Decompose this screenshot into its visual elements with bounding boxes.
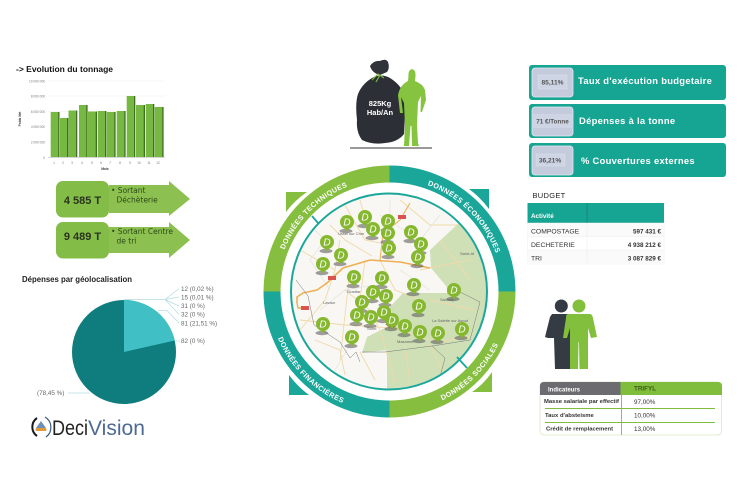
logo: decivision — [32, 417, 145, 440]
bar chart: tonnage per month: Mois — [101, 167, 109, 171]
kpi: depenses a la tonne: 71 €/Tonne — [536, 118, 569, 126]
icon: garbage bag and person — [350, 60, 432, 148]
map: territory with pins: Mazamet — [397, 339, 414, 344]
map: territory with pins: Sorel — [367, 326, 376, 331]
bar chart: tonnage per month: 4 — [81, 161, 83, 165]
heading: depenses par geolocalisation: Dépenses par géolocalisation — [22, 275, 132, 284]
map pins: D — [417, 240, 425, 250]
bar chart: tonnage per month: 11 — [147, 161, 151, 165]
map: territory with pins: Ussel sur Cher — [338, 231, 365, 236]
map pins: D — [378, 274, 386, 284]
table: indicateurs: Masse salariale par effectif — [544, 399, 619, 405]
map pins: D — [458, 324, 466, 336]
table: budget: DECHETERIE — [531, 242, 575, 249]
ring: four data quadrants — [264, 166, 516, 418]
logo: decivision: Deci — [52, 417, 88, 440]
table: indicateurs: Taux d'absteisme — [545, 413, 594, 419]
map: territory with pins — [290, 190, 500, 392]
kpi: depenses a la tonne — [529, 104, 726, 138]
bar chart: tonnage per month: 5 — [91, 161, 93, 165]
kpi: depenses a la tonne: Dépenses à la tonne — [579, 115, 675, 126]
map: territory with pins: La Salette sur Agout — [432, 318, 469, 323]
table: budget: 3 087 829 € — [628, 256, 661, 262]
table: budget: 597 431 € — [633, 228, 661, 236]
map: territory with pins: Saldadi — [440, 297, 453, 302]
map pins: D — [380, 308, 388, 318]
map pins: D — [384, 228, 392, 240]
map pins: D — [353, 310, 361, 322]
kpi: taux d'execution budgetaire — [529, 65, 726, 100]
map pins: D — [415, 302, 423, 312]
heading: budget: BUDGET — [532, 191, 566, 200]
map pins: D — [319, 260, 327, 270]
bar chart: tonnage per month: 2 000 000 — [31, 140, 45, 144]
map pins: D — [401, 322, 409, 332]
map pins — [316, 210, 469, 348]
bar chart: tonnage per month: 6 000 000 — [31, 110, 45, 114]
kpi: couvertures externes: 36,21% — [539, 158, 561, 164]
table: budget: COMPOSTAGE — [531, 228, 580, 236]
map pins: D — [382, 292, 390, 302]
callout: sortant centre de tri: de tri — [116, 236, 136, 246]
bar chart: tonnage per month: 7 — [109, 161, 111, 165]
label: donnees economiques: DONNÉES ÉCONOMIQUES — [428, 180, 500, 252]
kpi: taux d'execution budgetaire: Taux d'exécution budgetaire — [578, 75, 712, 86]
map pins: D — [384, 216, 392, 228]
callout: sortant centre de tri: • Sortant Centre — [111, 227, 173, 236]
icon: garbage bag and person: 825Kg — [369, 99, 392, 108]
table: budget: 4 938 212 € — [628, 242, 661, 249]
map pins: D — [358, 298, 366, 308]
table: budget — [528, 203, 664, 264]
bar chart: tonnage per month — [18, 80, 165, 171]
map pins: D — [323, 238, 331, 248]
kpi: couvertures externes: % Couvertures externes — [581, 155, 695, 166]
map pins: D — [361, 212, 369, 224]
pie chart: depenses: 12 (0,02 %) — [181, 286, 214, 293]
pie chart: depenses: (78,45 %) — [37, 390, 64, 397]
table: indicateurs: 97,00% — [634, 399, 656, 406]
map: territory with pins: Saint-Af — [460, 251, 475, 256]
callout: sortant dechetterie: • Sortant — [111, 186, 146, 195]
callout: sortant dechetterie: Déchèterie — [116, 196, 158, 204]
icon: two people — [545, 300, 597, 369]
map: territory with pins: Gradtar — [347, 289, 361, 294]
bar chart: tonnage per month: 4 000 000 — [31, 125, 45, 129]
pie chart: depenses: 32 (0 %) — [181, 312, 205, 318]
table: budget: TRI — [531, 256, 542, 262]
kpi: taux d'execution budgetaire: 85,11% — [542, 80, 564, 86]
bar chart: tonnage per month: 10 000 000 — [29, 80, 45, 84]
bar chart: tonnage per month: 1 — [53, 161, 55, 165]
table: indicateurs — [540, 382, 722, 435]
pie chart: depenses: 82 (0 %) — [181, 338, 205, 345]
callout: sortant dechetterie — [56, 181, 190, 218]
heading: evolution du tonnage: -> Evolution du tonnage — [16, 64, 113, 74]
table: indicateurs: Crédit de remplacement — [546, 426, 613, 432]
bar chart: tonnage per month: 6 — [100, 161, 102, 165]
icon: garbage bag and person: Hab/An — [367, 108, 394, 117]
arrow corners around ring — [286, 189, 492, 395]
map pins: D — [414, 252, 422, 264]
map pins: D — [407, 228, 415, 238]
map pins: D — [369, 224, 377, 236]
map pins: D — [367, 312, 375, 324]
map pins: D — [450, 286, 458, 296]
pie chart: depenses: 15 (0,01 %) — [181, 294, 214, 302]
bar chart: tonnage per month: 8 — [119, 161, 121, 165]
callout: sortant dechetterie: 4 585 T — [64, 195, 101, 207]
map pins: D — [385, 244, 393, 254]
map pins: D — [337, 250, 345, 262]
label: donnees sociales: DONNÉES SOCIALES — [440, 343, 498, 400]
pie chart: depenses: 31 (0 %) — [181, 303, 205, 310]
map pins: D — [410, 280, 418, 292]
map pins: D — [416, 328, 424, 338]
bar chart: tonnage per month: 2 — [62, 161, 64, 165]
map pins: D — [319, 320, 327, 330]
callout: sortant centre de tri — [56, 222, 190, 258]
logo: decivision: Vision — [88, 417, 145, 440]
map: territory with pins: Lavaur — [323, 300, 336, 305]
map pins: D — [348, 332, 356, 344]
bar chart: tonnage per month: 0 — [43, 156, 45, 160]
map pins: D — [434, 328, 442, 340]
callout: sortant centre de tri: 9 489 T — [64, 231, 101, 243]
label: donnees techniques: DONNÉES TECHNIQUES — [280, 182, 347, 250]
bar chart: tonnage per month: 12 — [156, 161, 160, 165]
bar chart: tonnage per month: Poids Net — [18, 111, 22, 126]
table: indicateurs: 10,00% — [634, 412, 656, 420]
table: budget: Activité — [531, 213, 554, 220]
label: donnees financieres: DONNÉES FINANCIÈRES — [278, 336, 344, 402]
map pins: D — [369, 288, 377, 298]
bar chart: tonnage per month: 8 000 000 — [31, 94, 45, 98]
kpi: couvertures externes — [529, 143, 726, 177]
map pins: D — [350, 272, 358, 284]
bar chart: tonnage per month: 10 — [137, 161, 141, 165]
pie chart: depenses: 81 (21,51 %) — [181, 320, 217, 328]
table: indicateurs: TRIFYL — [634, 386, 656, 392]
table: indicateurs: Indicateurs — [548, 388, 581, 394]
map pins: D — [343, 218, 351, 228]
pie chart: depenses — [37, 286, 217, 404]
table: indicateurs: 13,00% — [634, 426, 656, 433]
bar chart: tonnage per month: 9 — [129, 161, 131, 165]
bar chart: tonnage per month: 3 — [71, 161, 73, 165]
map pins: D — [388, 316, 396, 326]
